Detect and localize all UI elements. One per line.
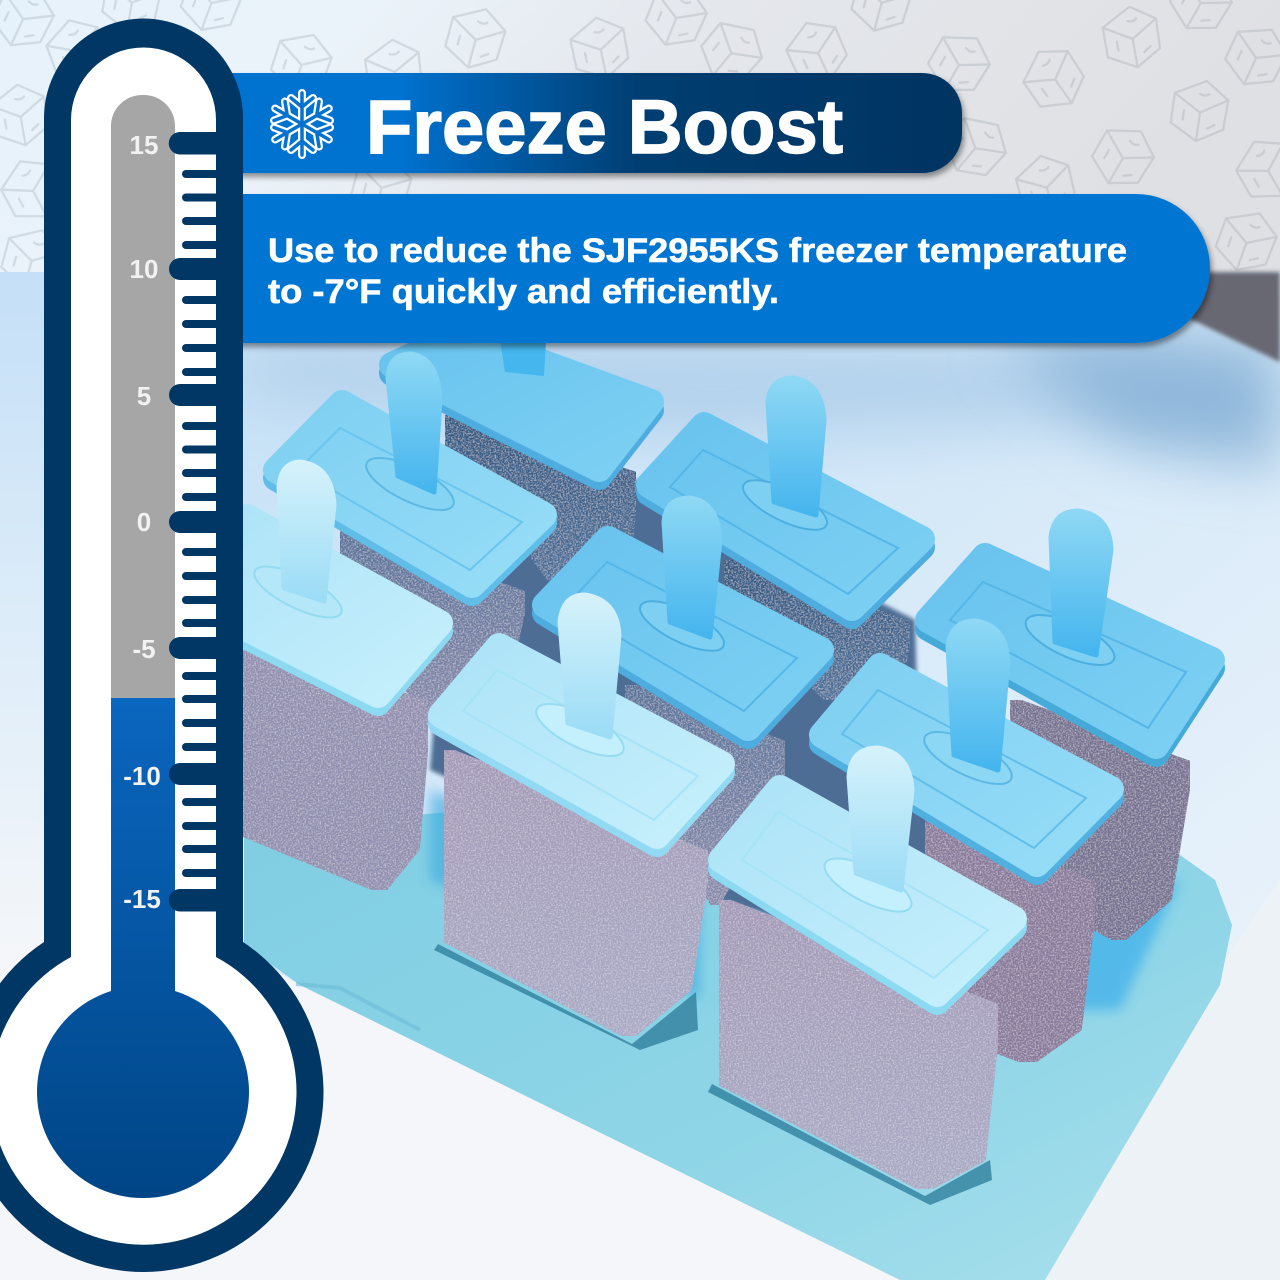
scale labels: -5 (132, 634, 156, 664)
heading banner: Freeze Boost (200, 73, 962, 173)
title text: Freeze Boost (366, 85, 843, 170)
scale labels: -15 (123, 884, 161, 914)
ice pop: right middle (822, 621, 1111, 1062)
ice pop: front left (184, 462, 440, 890)
scale labels: 15 (130, 130, 158, 160)
mercury: blue fluid and bulb (37, 698, 249, 1198)
scale labels: 0 (137, 507, 151, 537)
scale labels (123, 130, 161, 914)
ice pop: front right (708, 748, 1014, 1205)
ice pop: right back (928, 511, 1212, 940)
scale labels: -10 (123, 761, 161, 791)
description text (268, 232, 1127, 311)
description text: Use to reduce the SJF2955KS freezer temperature (268, 232, 1127, 270)
description panel (200, 194, 1210, 343)
thermometer inner glass (0, 47, 297, 1245)
scale ticks (169, 132, 222, 912)
mercury: grey channel (111, 95, 175, 698)
scale labels: 5 (137, 381, 151, 411)
photo backdrop (0, 272, 1280, 1280)
ice pop: middle centre (545, 498, 821, 905)
background: ice cube pattern area (0, 0, 1280, 295)
thermometer (0, 19, 323, 1272)
ice pop: back centre (392, 333, 651, 590)
ice pop: front centre (434, 595, 722, 1050)
ice pop: back right (649, 378, 922, 700)
photo: popsicle tray in a freezer (0, 272, 1280, 1280)
description text: to -7°F quickly and efficiently. (268, 273, 779, 311)
shaded gap between the back pops (345, 480, 1050, 1000)
icon: snowflake (270, 93, 334, 155)
thermometer outer shell (0, 19, 323, 1272)
ice pop: second row left (276, 354, 544, 730)
scale labels: 10 (130, 254, 158, 284)
ice pop tray (244, 790, 1232, 1280)
